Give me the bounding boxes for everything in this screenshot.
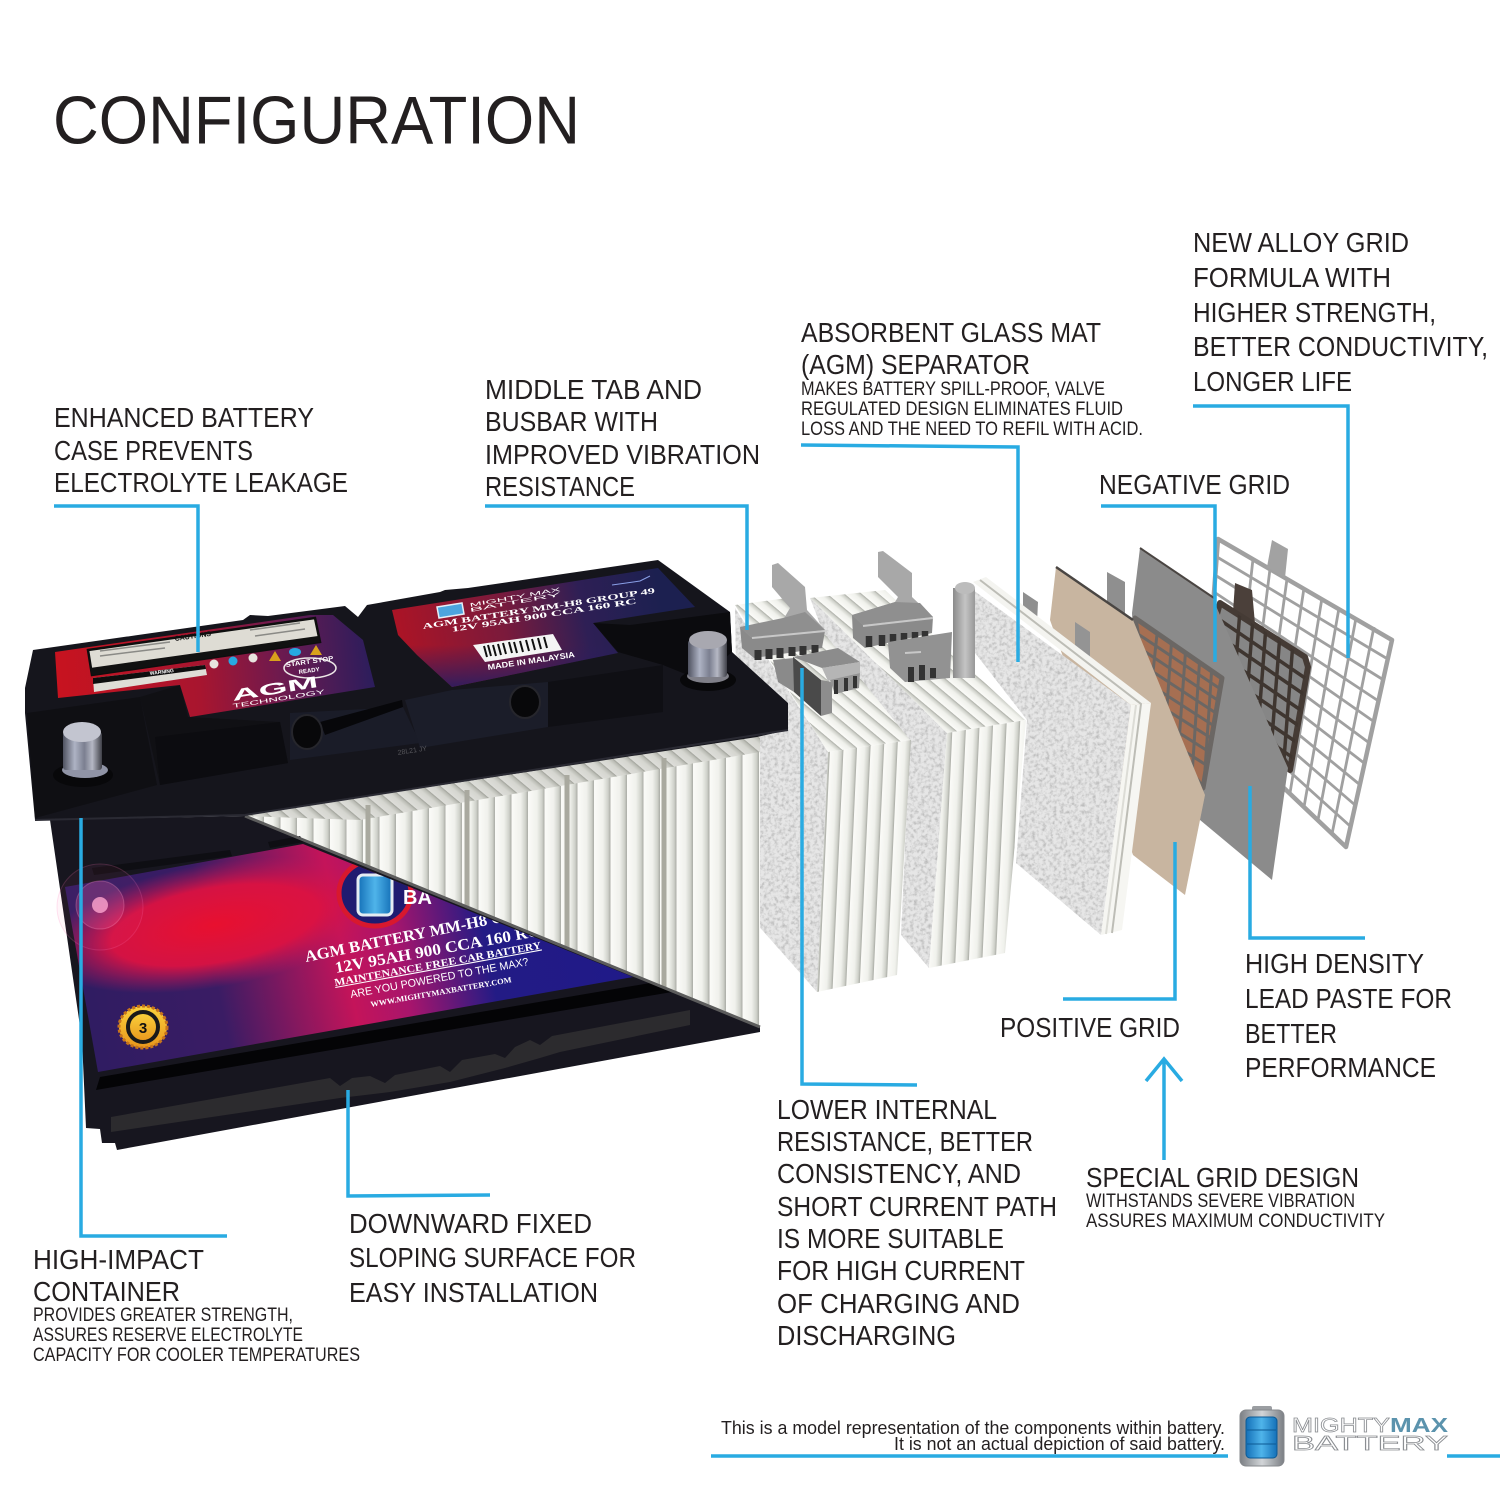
tan separator plate [1050,567,1205,895]
text: special grid design: WITHSTANDS SEVERE VIBRATION [1086,1191,1355,1212]
text: special grid design [1086,1162,1385,1232]
text: lower internal resistance: FOR HIGH CURRENT [777,1255,1025,1286]
text: high density lead paste: HIGH DENSITY [1245,948,1424,979]
negative grid plate [1132,548,1288,880]
text: high-impact container: HIGH-IMPACT [33,1244,204,1275]
callout line: high density lead paste [1250,786,1365,938]
busbars, front pair [740,563,860,716]
text: middle tab and busbar [485,374,760,502]
text: high-impact container: CAPACITY FOR COOLER TEMPERATURES [33,1345,360,1366]
text: middle tab and busbar: RESISTANCE [485,471,635,502]
left top label: AGM [231,674,319,705]
logo wordmark: MAX [1390,1415,1449,1437]
text: special grid design: ASSURES MAXIMUM CONDUCTIVITY [1086,1211,1385,1232]
text: enhanced battery case: CASE PREVENTS [54,435,253,466]
text: special grid design: SPECIAL GRID DESIGN [1086,1162,1359,1193]
text: middle tab and busbar: IMPROVED VIBRATION [485,439,760,470]
battery front label [57,844,633,1072]
text: high density lead paste [1245,948,1452,1083]
text: downward fixed surface: SLOPING SURFACE FOR [349,1242,636,1273]
text: new alloy grid [1193,227,1488,397]
text: high-impact container [33,1244,360,1366]
safety icons [210,645,322,668]
text: high-impact container: CONTAINER [33,1276,180,1307]
text: negative grid: NEGATIVE GRID [1099,469,1290,500]
right label logo [437,587,562,618]
text: lower internal resistance: LOWER INTERNAL [777,1094,997,1125]
text: lower internal resistance: SHORT CURRENT PATH [777,1191,1057,1222]
right label logo: BATTERY [469,592,562,614]
front label logo and text: BA [403,887,432,909]
text: new alloy grid: HIGHER STRENGTH, [1193,297,1436,328]
text: AGM separator: MAKES BATTERY SPILL-PROOF, VALVE [801,379,1105,400]
battery body container [50,816,760,1150]
left top label: TECHNOLOGY [232,690,325,710]
text: AGM separator: REGULATED DESIGN ELIMINATES FLUID [801,399,1123,420]
front label logo and text: WWW.MIGHTYMAXBATTERY.COM [370,975,513,1009]
front label logo and text: ARE YOU POWERED TO THE MAX? [349,956,530,1001]
text: lower internal resistance: OF CHARGING AND [777,1288,1020,1319]
footer note [721,1418,1225,1454]
filler plugs [292,686,540,749]
caution sticker [88,618,320,675]
high density lead paste plate [1210,583,1308,772]
text: AGM separator: (AGM) SEPARATOR [801,349,1030,380]
right top label [392,568,695,687]
front label logo and text: MAINTENANCE FREE CAR BATTERY [334,940,543,989]
text: downward fixed surface [349,1208,636,1308]
positive grid copper lattice [1135,618,1222,788]
callout line: negative grid [1101,506,1215,662]
callout line: middle tab [485,506,747,630]
text: AGM separator: LOSS AND THE NEED TO REFIL WITH ACID. [801,419,1143,440]
text: middle tab and busbar: MIDDLE TAB AND [485,374,702,405]
text: high density lead paste: BETTER [1245,1018,1337,1049]
text: positive grid: POSITIVE GRID [1000,1012,1180,1043]
text: enhanced battery case: ENHANCED BATTERY [54,402,314,433]
text: high-impact container: ASSURES RESERVE ELECTROLYTE [33,1325,303,1346]
right label logo: MIGHTY MAX [469,587,562,609]
left top label [55,615,375,717]
text: lower internal resistance [777,1094,1057,1351]
callout line: enhanced battery case [54,506,198,652]
footer note: It is not an actual depiction of said battery. [894,1434,1225,1454]
warning sticker: WARNING [150,668,174,677]
text: high density lead paste: PERFORMANCE [1245,1052,1436,1083]
battery lid: 28L21 JY [397,745,428,757]
text: downward fixed surface: DOWNWARD FIXED [349,1208,592,1239]
callout line: lower internal resistance [802,668,917,1085]
text: middle tab and busbar: BUSBAR WITH [485,406,658,437]
tab behind tan separator [1107,572,1125,615]
new alloy grid component [1205,539,1392,847]
footer rule [711,1454,1500,1458]
callout line: positive grid [1063,842,1175,999]
text: lower internal resistance: CONSISTENCY, AND [777,1158,1021,1189]
text: high-impact container: PROVIDES GREATER STRENGTH, [33,1305,293,1326]
left terminal post [53,722,113,787]
arrow: special grid design to positive grid [1146,1059,1182,1160]
front label logo and text [303,860,552,1009]
text: new alloy grid: LONGER LIFE [1193,366,1352,397]
warning sticker [93,665,207,692]
callout line: high-impact container [81,818,227,1236]
tab on AGM separator [1023,592,1038,623]
text: lower internal resistance: IS MORE SUITABLE [777,1223,1004,1254]
text: enhanced battery case: ELECTROLYTE LEAKAGE [54,467,348,498]
start stop ready badge: START STOP [285,655,335,669]
warranty badge [119,1006,167,1048]
warranty badge: 3 [139,1020,147,1037]
text: AGM separator: ABSORBENT GLASS MAT [801,317,1101,348]
callout line: new alloy grid [1193,406,1348,658]
footer note: This is a model representation of the components within battery. [721,1418,1225,1438]
text: new alloy grid: FORMULA WITH [1193,262,1391,293]
AGM separator block [965,577,1151,935]
callout line: downward fixed surface [348,1090,490,1196]
text: high density lead paste: LEAD PASTE FOR [1245,983,1452,1014]
exposed cells inside battery cutaway [248,736,760,1025]
caution sticker: CAUTIONS [174,631,212,643]
front label logo and text: 12V 95AH 900 CCA 160 RC [334,923,541,977]
text: enhanced battery case [54,402,348,498]
text: lower internal resistance: RESISTANCE, BETTER [777,1126,1033,1157]
right top label: MADE IN MALAYSIA [487,650,576,672]
text: downward fixed surface: EASY INSTALLATION [349,1277,598,1308]
right terminal post [680,631,736,691]
barcode [473,634,562,662]
logo wordmark [1292,1415,1449,1455]
title: CONFIGURATION [53,82,580,158]
front label logo and text: AGM BATTERY MM-H8 GROUP [303,899,552,966]
logo wordmark: MIGHTY [1292,1415,1390,1437]
cut edge of cutaway [245,816,760,1027]
right top label: AGM BATTERY MM-H8 GROUP 49 [422,586,656,631]
text: lower internal resistance: DISCHARGING [777,1320,956,1351]
icon: battery logo [1240,1406,1284,1466]
text: new alloy grid: NEW ALLOY GRID [1193,227,1409,258]
cell stack two [810,590,1026,968]
cell stack one [735,597,911,992]
text: AGM separator [801,317,1143,440]
lens flare [57,864,143,950]
battery lid [25,560,788,820]
busbars and terminal post, rear pair [852,551,975,682]
start stop ready badge: READY [298,667,320,676]
logo wordmark: BATTERY [1292,1433,1448,1455]
right top label: 12V 95AH 900 CCA 160 RC [451,596,638,634]
callout line: AGM separator [801,445,1018,662]
start stop ready badge [284,655,336,678]
